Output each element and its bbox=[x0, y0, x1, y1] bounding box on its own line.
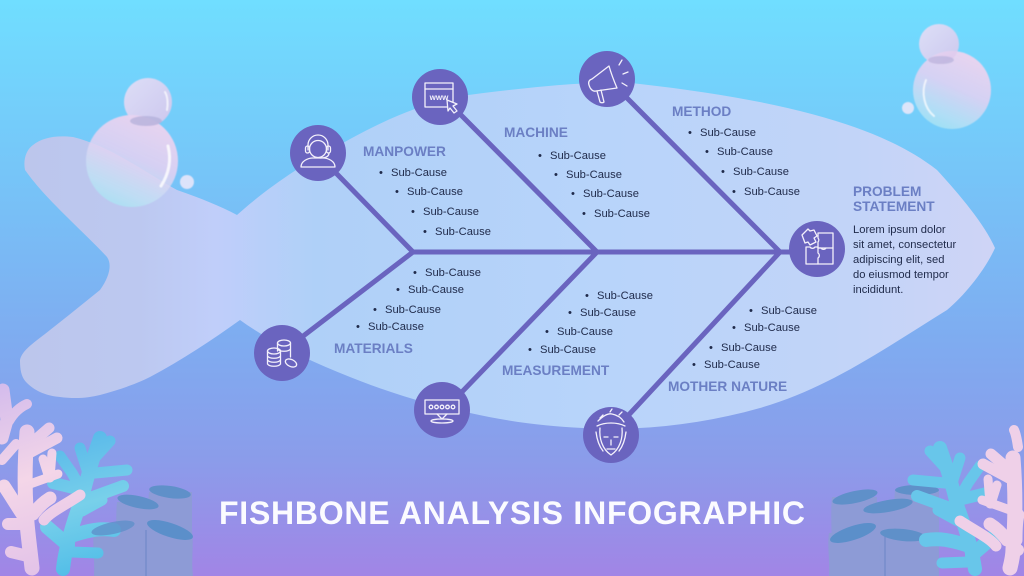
problem statement body bbox=[853, 224, 956, 296]
title: FISHBONE ANALYSIS INFOGRAPHIC bbox=[219, 495, 805, 531]
materials heading: MATERIALS bbox=[334, 341, 413, 356]
method sub-causes: Sub-Cause bbox=[733, 166, 789, 178]
method sub-causes: Sub-Cause bbox=[700, 127, 756, 139]
materials sub-causes: Sub-Cause bbox=[425, 267, 481, 279]
manpower sub-causes: Sub-Cause bbox=[407, 186, 463, 198]
mother nature sub-causes: • bbox=[692, 359, 696, 371]
materials sub-causes: • bbox=[413, 267, 417, 279]
measurement sub-causes: • bbox=[528, 344, 532, 356]
machine sub-causes: • bbox=[554, 169, 558, 181]
node: method bbox=[579, 51, 635, 107]
node: mother nature bbox=[583, 407, 639, 463]
mother nature sub-causes bbox=[692, 305, 817, 371]
measurement sub-causes: Sub-Cause bbox=[597, 290, 653, 302]
manpower sub-causes: Sub-Cause bbox=[391, 167, 447, 179]
materials sub-causes: • bbox=[396, 284, 400, 296]
fish silhouette bbox=[20, 83, 995, 429]
mother nature sub-causes: • bbox=[732, 322, 736, 334]
measurement sub-causes: • bbox=[568, 307, 572, 319]
measurement sub-causes bbox=[528, 290, 653, 356]
machine sub-causes: Sub-Cause bbox=[594, 208, 650, 220]
problem statement body: Lorem ipsum dolor bbox=[853, 224, 946, 236]
mother nature heading: MOTHER NATURE bbox=[668, 379, 787, 394]
pink coral: right bbox=[960, 430, 1018, 568]
bubbles: right group bbox=[902, 24, 991, 129]
manpower sub-causes: Sub-Cause bbox=[435, 226, 491, 238]
manpower heading: MANPOWER bbox=[363, 144, 446, 159]
materials sub-causes: Sub-Cause bbox=[368, 321, 424, 333]
sponge rim overlay: left bbox=[90, 518, 136, 538]
measurement sub-causes: • bbox=[585, 290, 589, 302]
problem statement heading bbox=[853, 184, 935, 214]
icon: megaphone bbox=[589, 60, 628, 103]
manpower sub-causes: • bbox=[423, 226, 427, 238]
method sub-causes: Sub-Cause bbox=[744, 186, 800, 198]
measurement sub-causes: Sub-Cause bbox=[540, 344, 596, 356]
sponges: right bbox=[828, 485, 939, 576]
measurement heading: MEASUREMENT bbox=[502, 363, 610, 378]
materials sub-causes: Sub-Cause bbox=[408, 284, 464, 296]
mother nature sub-causes: • bbox=[749, 305, 753, 317]
method heading: METHOD bbox=[672, 104, 731, 119]
machine sub-causes: Sub-Cause bbox=[583, 188, 639, 200]
machine sub-causes: • bbox=[571, 188, 575, 200]
machine sub-causes: • bbox=[538, 150, 542, 162]
method sub-causes bbox=[688, 127, 800, 198]
mother nature sub-causes: Sub-Cause bbox=[721, 342, 777, 354]
problem statement body: adipiscing elit, sed bbox=[853, 254, 944, 266]
measurement sub-causes: • bbox=[545, 326, 549, 338]
machine sub-causes bbox=[538, 150, 650, 220]
coral group: bottom left bbox=[2, 390, 195, 576]
icon: headset agent bbox=[301, 135, 335, 167]
machine heading: MACHINE bbox=[504, 125, 568, 140]
manpower sub-causes: • bbox=[411, 206, 415, 218]
problem statement body: sit amet, consectetur bbox=[853, 239, 956, 251]
icon: woman with headdress bbox=[596, 409, 626, 455]
measurement sub-causes: Sub-Cause bbox=[557, 326, 613, 338]
mother nature sub-causes: • bbox=[709, 342, 713, 354]
icon: browser www: www bbox=[429, 93, 449, 102]
method sub-causes: • bbox=[688, 127, 692, 139]
node: materials bbox=[254, 325, 310, 381]
node: machine bbox=[412, 69, 468, 125]
materials sub-causes: Sub-Cause bbox=[385, 304, 441, 316]
pink coral: left bbox=[2, 390, 80, 568]
method sub-causes: • bbox=[705, 146, 709, 158]
manpower sub-causes: • bbox=[379, 167, 383, 179]
fishbone lines bbox=[298, 96, 795, 420]
problem statement heading: STATEMENT bbox=[853, 199, 935, 214]
coral group: bottom right bbox=[828, 430, 1018, 576]
icon: rating review bbox=[425, 400, 459, 423]
blue coral: right bbox=[913, 448, 993, 569]
node: manpower bbox=[290, 125, 346, 181]
materials sub-causes: • bbox=[373, 304, 377, 316]
blue coral: left bbox=[47, 438, 127, 569]
problem statement body: do eiusmod tempor bbox=[853, 269, 949, 281]
node: measurement bbox=[414, 382, 470, 438]
mother nature sub-causes: Sub-Cause bbox=[761, 305, 817, 317]
manpower sub-causes bbox=[379, 167, 491, 238]
icon: puzzle pieces bbox=[802, 229, 833, 264]
mother nature sub-causes: Sub-Cause bbox=[704, 359, 760, 371]
sponges: left bbox=[93, 483, 195, 576]
icon: coin stacks bbox=[268, 340, 298, 369]
machine sub-causes: Sub-Cause bbox=[566, 169, 622, 181]
problem statement body: incididunt. bbox=[853, 284, 903, 296]
machine sub-causes: Sub-Cause bbox=[550, 150, 606, 162]
method sub-causes: • bbox=[732, 186, 736, 198]
bubbles: left group bbox=[86, 78, 194, 207]
method sub-causes: Sub-Cause bbox=[717, 146, 773, 158]
node: problem bbox=[789, 221, 845, 277]
problem statement heading: PROBLEM bbox=[853, 184, 921, 199]
manpower sub-causes: • bbox=[395, 186, 399, 198]
manpower sub-causes: Sub-Cause bbox=[423, 206, 479, 218]
mother nature sub-causes: Sub-Cause bbox=[744, 322, 800, 334]
measurement sub-causes: Sub-Cause bbox=[580, 307, 636, 319]
method sub-causes: • bbox=[721, 166, 725, 178]
materials sub-causes bbox=[356, 267, 481, 333]
materials sub-causes: • bbox=[356, 321, 360, 333]
machine sub-causes: • bbox=[582, 208, 586, 220]
